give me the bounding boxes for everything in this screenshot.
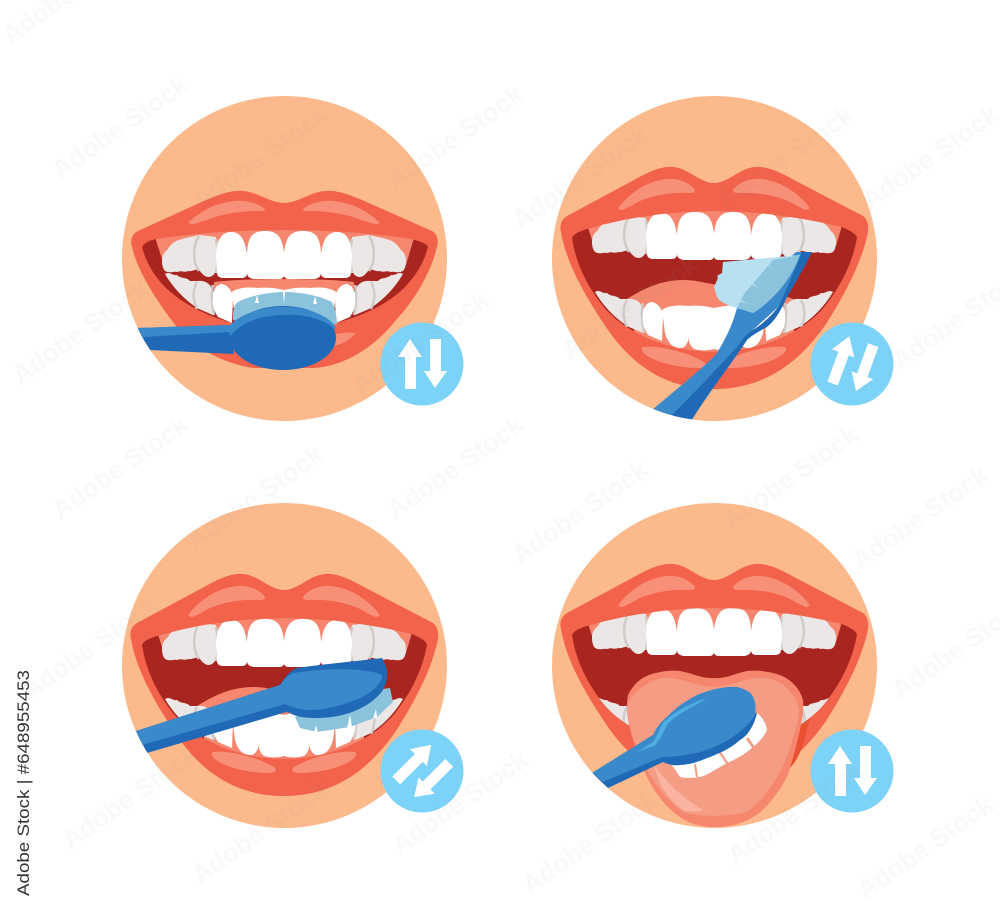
watermark pattern: Adobe Stock — [721, 754, 869, 870]
skin circle — [122, 96, 447, 421]
panel: brushing outer side teeth — [122, 503, 464, 828]
skin circle — [552, 96, 877, 421]
watermark pattern: Adobe Stock — [711, 99, 859, 215]
bristles — [672, 713, 767, 778]
watermark pattern: Adobe Stock — [506, 454, 654, 570]
skin circle — [122, 503, 447, 828]
tongue — [627, 671, 803, 827]
panel: brushing inner upper teeth — [552, 96, 894, 423]
lips — [130, 574, 438, 796]
lip highlights — [189, 586, 379, 773]
handle mid — [652, 252, 806, 423]
mouth with teeth — [142, 230, 428, 323]
watermark pattern: Adobe Stock — [506, 119, 654, 235]
lip highlights — [619, 576, 809, 607]
lips — [560, 167, 868, 389]
watermark pattern: Adobe Stock — [46, 69, 194, 185]
watermark pattern: Adobe Stock — [346, 284, 494, 400]
toothbrush — [592, 687, 767, 788]
watermark pattern: Adobe Stock — [386, 744, 534, 860]
toothbrush — [137, 292, 337, 370]
head — [230, 306, 336, 370]
mouth with teeth — [142, 609, 427, 765]
lips — [560, 564, 868, 786]
lips — [131, 191, 438, 368]
handle dark — [672, 252, 812, 423]
lip highlights — [189, 201, 379, 346]
lip shadow under tongue — [786, 705, 810, 771]
direction badge — [380, 322, 464, 406]
light body — [592, 687, 756, 782]
lip highlights — [619, 179, 809, 368]
handle and head dark — [136, 658, 387, 753]
watermark pattern: Adobe Stock — [381, 79, 529, 195]
watermark pattern: Adobe Stock — [186, 99, 334, 215]
handle — [137, 325, 234, 354]
watermark pattern: Adobe Stock — [16, 589, 164, 705]
panel: brushing outer lower teeth — [122, 96, 464, 421]
brush highlight — [637, 698, 707, 752]
toothbrush — [652, 252, 812, 423]
handle and head light — [136, 669, 382, 745]
watermark pattern: Adobe Stock — [6, 274, 154, 390]
tongue highlight — [653, 763, 703, 812]
watermark pattern: Adobe Stock — [851, 789, 999, 905]
panel: brushing the tongue — [552, 503, 894, 828]
watermark pattern: Adobe Stock — [716, 419, 864, 535]
mouth with teeth — [572, 608, 857, 726]
watermark pattern: Adobe Stock — [846, 459, 994, 575]
skin circle — [552, 503, 877, 828]
mouth with teeth — [572, 202, 857, 358]
watermark pattern: Adobe Stock — [46, 409, 194, 525]
watermark pattern: Adobe Stock — [556, 249, 704, 365]
bristles — [233, 292, 337, 324]
watermark pattern: Adobe Stock — [516, 784, 664, 900]
watermark pattern: Adobe Stock — [856, 99, 1000, 215]
direction badge — [810, 730, 894, 812]
dark body — [592, 713, 757, 788]
watermark pattern: Adobe Stock — [186, 774, 334, 890]
direction badge — [380, 730, 464, 812]
stock id label: Adobe Stock | #648955453 — [14, 670, 33, 896]
watermark pattern: Adobe Stock — [381, 409, 529, 525]
watermark pattern: Adobe Stock — [181, 439, 329, 555]
direction badge — [810, 322, 894, 406]
bristles — [295, 688, 393, 732]
watermark pattern: Adobe Stock — [56, 739, 204, 855]
bristles — [714, 255, 800, 313]
toothbrush — [136, 658, 393, 753]
